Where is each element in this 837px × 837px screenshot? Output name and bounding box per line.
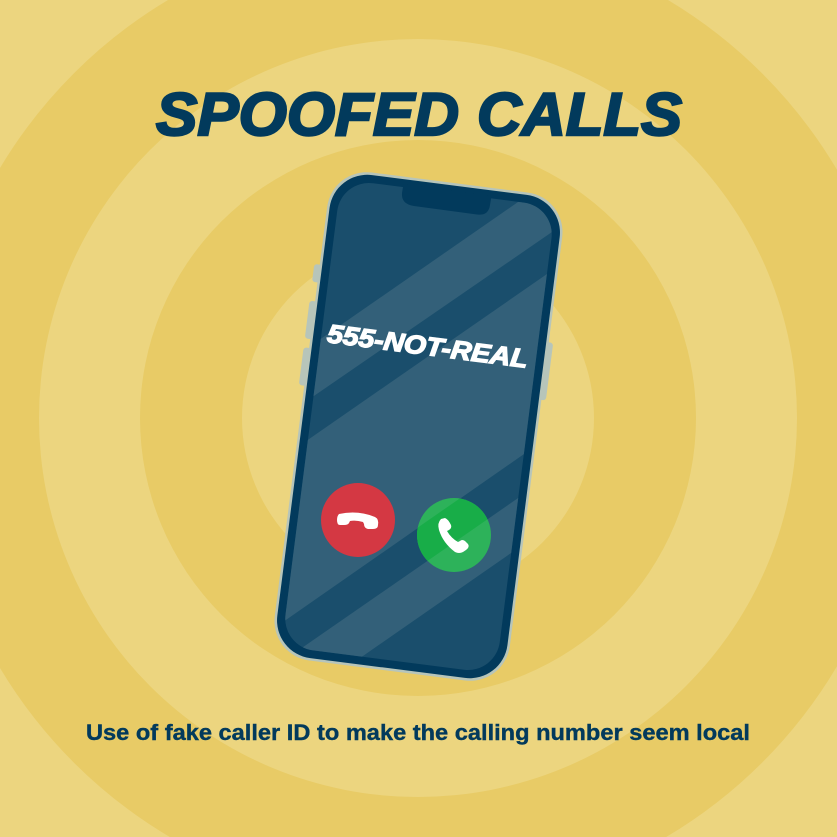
caption: Use of fake caller ID to make the calling number seem local — [86, 720, 750, 745]
decline button — [321, 483, 395, 557]
phone side buttons — [299, 264, 559, 416]
caller number: 555-NOT-REAL — [326, 318, 530, 374]
answer button — [417, 498, 491, 572]
phone notch — [402, 184, 492, 215]
title — [156, 81, 682, 148]
title: SPOOFED — [156, 81, 459, 148]
phone body — [270, 167, 567, 686]
icon: answer handset — [438, 518, 469, 553]
icon: hang-up handset — [337, 513, 378, 529]
phone screen with diagonal light bands — [285, 183, 552, 670]
title: CALLS — [477, 81, 682, 148]
phone illustration — [274, 172, 562, 681]
